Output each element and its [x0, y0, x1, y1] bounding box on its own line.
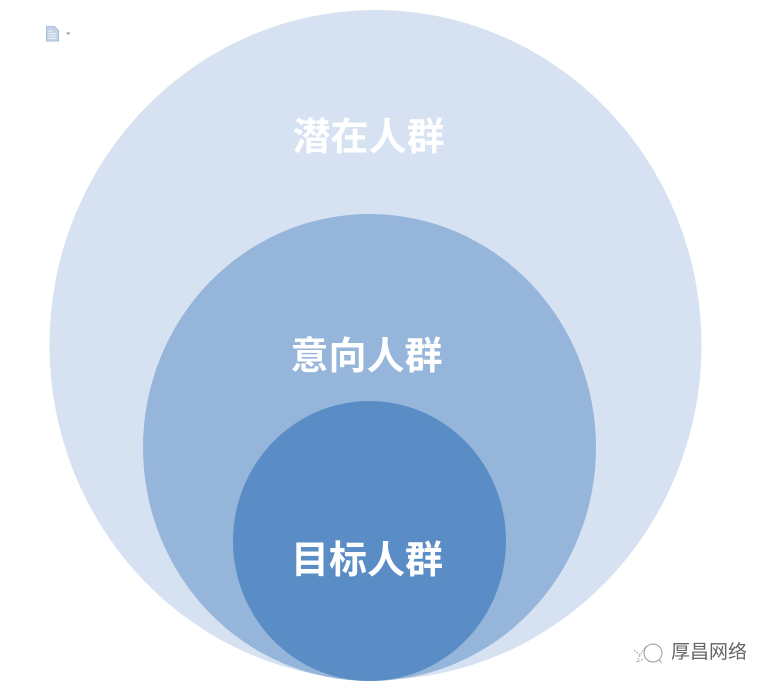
- label: target audience: 目标人群: [291, 540, 443, 582]
- icon: document with dropdown: [46, 26, 70, 41]
- label: interested audience: 意向人群: [290, 336, 443, 378]
- text: account name: 厚昌网络: [671, 641, 747, 663]
- circle: target audience: [233, 401, 506, 681]
- label: potential audience: 潜在人群: [292, 117, 445, 159]
- icon: WeChat bubbles: [634, 644, 662, 663]
- circle: interested audience: [143, 214, 596, 681]
- watermark: WeChat account: [634, 641, 747, 663]
